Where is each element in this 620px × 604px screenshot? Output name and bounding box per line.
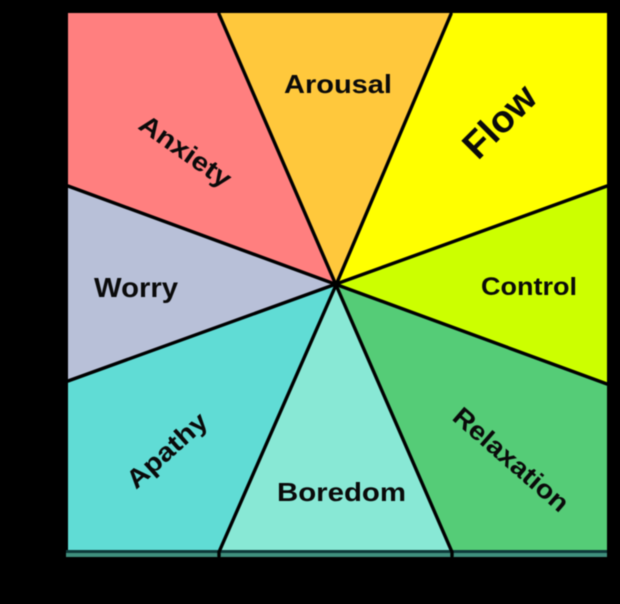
label: Arousal: Arousal (284, 69, 392, 99)
sector: anxiety (68, 13, 336, 285)
sector: arousal (219, 13, 451, 285)
label: Worry: Worry (94, 272, 178, 303)
label: Relaxation: Relaxation (447, 401, 575, 518)
sector: flow (336, 13, 607, 285)
sector: worry (68, 186, 336, 381)
label: Anxiety: Anxiety (134, 108, 238, 194)
sector: apathy (68, 285, 336, 552)
sector: relaxation (336, 285, 607, 552)
label: Boredom: Boredom (277, 477, 406, 507)
label: Apathy: Apathy (120, 406, 214, 494)
sector: boredom (219, 285, 451, 552)
label: Control: Control (481, 273, 577, 301)
sector: control (336, 186, 607, 384)
label: Flow: Flow (455, 76, 546, 167)
